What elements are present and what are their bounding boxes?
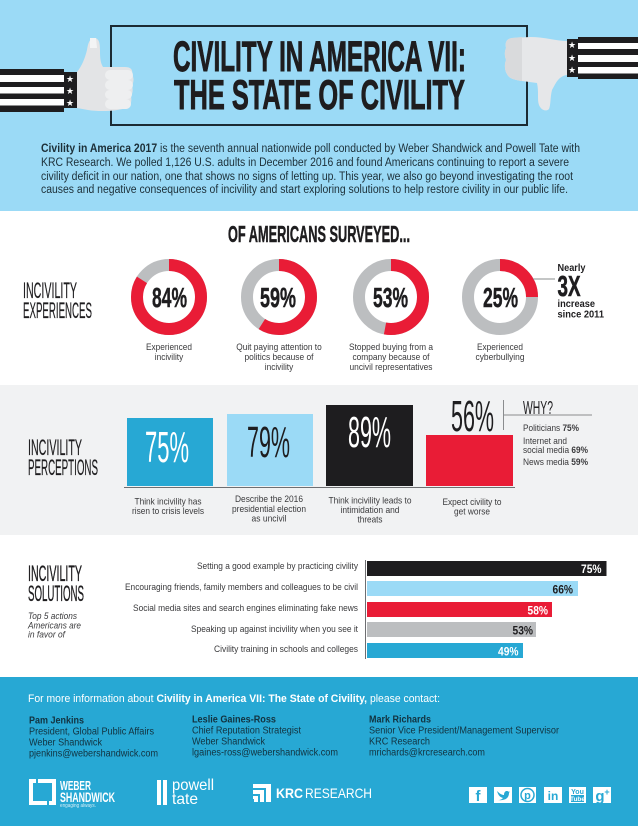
- why callout: [503, 398, 592, 467]
- logo: Powell Tate: [157, 777, 214, 808]
- bar: 75%: [127, 418, 213, 486]
- panel: incivility solutions: SOLUTIONS: [28, 581, 84, 606]
- contact: Mark Richards: [369, 714, 560, 758]
- donut: 25%: 25%: [483, 282, 518, 313]
- bar row: 58%: [133, 602, 552, 618]
- bar row: 75%: 75%: [581, 562, 602, 576]
- icon: thumbs up: ★: [66, 86, 74, 96]
- icon: thumbs up: ★: [66, 98, 74, 108]
- contact: Mark Richards: mrichards@krcresearch.com: [369, 748, 485, 758]
- icon: thumbs down: ★: [568, 65, 576, 75]
- section label: [28, 561, 84, 606]
- icon: facebook: f: [476, 788, 482, 805]
- icon: google plus: [593, 787, 611, 805]
- icon: linkedin: [544, 787, 562, 803]
- bar captions: as uncivil: [252, 514, 286, 524]
- section label: [23, 278, 92, 323]
- note: top 5 actions: [27, 611, 81, 640]
- donut captions: politics because of: [244, 352, 314, 362]
- contact: Leslie Gaines-Ross: Leslie Gaines-Ross: [192, 714, 276, 726]
- icon: google plus: +: [604, 787, 610, 797]
- icon: thumbs down: ★: [568, 53, 576, 63]
- intro text: Civility in America 2017 is the seventh annual nationwide poll conducted by Weber Shandwick and Powell Tate with: [41, 143, 580, 155]
- callout: nearly 3X: 3X: [558, 271, 581, 303]
- icon: linkedin: in: [548, 789, 558, 803]
- logo: KRC Research: RESEARCH: [305, 785, 372, 801]
- donut captions: incivility: [155, 352, 184, 362]
- bar captions: get worse: [454, 506, 490, 516]
- why callout: News media 59%: [523, 457, 588, 467]
- bar row: 49%: [214, 643, 523, 658]
- donut captions: incivility: [265, 362, 294, 372]
- section label: INCIVILITY: [23, 278, 77, 303]
- why callout: Internet and: [523, 436, 567, 446]
- icon: facebook: [469, 787, 487, 805]
- panel: footer: [0, 677, 638, 826]
- donut captions: Stopped buying from a: [349, 342, 434, 352]
- bar captions: [132, 494, 502, 524]
- contact: Leslie Gaines-Ross: Weber Shandwick: [192, 736, 266, 748]
- contact: Pam Jenkins: Weber Shandwick: [29, 738, 103, 748]
- donut captions: company because of: [352, 352, 430, 362]
- note: top 5 actions: Top 5 actions: [28, 611, 77, 621]
- bar row: 49%: 49%: [498, 644, 519, 658]
- icon: youtube: Tube: [570, 796, 585, 803]
- bar row: 53%: [191, 622, 536, 638]
- bar row: 66%: Encouraging friends, family members and colleagues to be civil: [125, 582, 358, 592]
- bar: 56%: [426, 392, 513, 486]
- donut: 59%: 59%: [260, 282, 296, 313]
- logo: Weber Shandwick: WEBER: [60, 778, 91, 793]
- donut captions: Quit paying attention to: [236, 342, 322, 352]
- bar captions: presidential election: [232, 504, 306, 514]
- section label: INCIVILITY: [28, 561, 82, 586]
- icon: thumbs up: [0, 38, 134, 112]
- bar captions: threats: [358, 514, 383, 524]
- donut: 59%: [247, 265, 311, 329]
- social icons: [469, 787, 611, 805]
- logo: Weber Shandwick: SHANDWICK: [60, 789, 115, 805]
- callout: nearly 3X: [533, 263, 604, 320]
- bar row: 53%: 53%: [512, 624, 533, 638]
- bar row: 58%: 58%: [528, 604, 548, 618]
- donut: 53%: 53%: [373, 282, 408, 313]
- icon: pinterest: p: [524, 790, 531, 802]
- intro text: civility deficit in our nation, one that shows no signs of letting up. This year, we also go beyond investigating the root: [41, 171, 574, 183]
- contact: Pam Jenkins: President, Global Public Affairs: [29, 726, 154, 738]
- donut captions: [146, 342, 524, 372]
- bar: 79%: [227, 414, 313, 486]
- intro text: [41, 143, 580, 196]
- bar captions: risen to crisis levels: [132, 506, 204, 516]
- bar row: 75%: Setting a good example by practicing civility: [197, 561, 358, 571]
- why callout: WHY?: [523, 398, 553, 418]
- icon: pinterest: [519, 787, 536, 803]
- bar captions: Describe the 2016: [235, 494, 303, 504]
- heading: of Americans surveyed: OF AMERICANS SURVEYED...: [228, 221, 410, 247]
- why callout: Politicians 75%: [523, 423, 579, 433]
- title frame: [111, 26, 527, 125]
- donut: 53%: [359, 265, 423, 329]
- icon: youtube: You: [571, 789, 584, 796]
- logo: KRC Research: KRC: [276, 785, 303, 801]
- bar captions: Expect civility to: [442, 497, 502, 507]
- donut captions: Experienced: [146, 342, 192, 352]
- bar: 89%: 89%: [348, 408, 391, 457]
- title: [173, 33, 466, 118]
- callout: nearly 3X: since 2011: [558, 310, 604, 320]
- bar: 75%: 75%: [145, 423, 189, 472]
- contact: Mark Richards: KRC Research: [369, 736, 430, 748]
- contact: Pam Jenkins: pjenkins@webershandwick.com: [29, 748, 158, 760]
- panel: incivility experiences: EXPERIENCES: [23, 298, 92, 323]
- panel: header: [0, 0, 638, 211]
- icon: thumbs down: ★: [568, 40, 576, 50]
- icon: thumbs down: [505, 37, 638, 110]
- contact: Leslie Gaines-Ross: lgaines-ross@webershandwick.com: [192, 748, 338, 758]
- section label: INCIVILITY: [28, 435, 82, 460]
- bar: 79%: 79%: [247, 418, 290, 467]
- contact: Pam Jenkins: Pam Jenkins: [29, 716, 84, 726]
- bar captions: Think incivility leads to: [328, 496, 412, 506]
- bar row: 58%: Social media sites and search engines eliminating fake news: [133, 603, 358, 613]
- panel: incivility experiences: [0, 211, 638, 385]
- why callout: social media 69%: [523, 445, 588, 455]
- bar row: 66%: 66%: [552, 582, 573, 596]
- logo: Weber Shandwick: [29, 778, 115, 809]
- intro text: KRC Research. We polled 1,126 U.S. adults in December 2016 and found Americans continuing to report a severe: [41, 157, 569, 169]
- bar row: 49%: Civility training in schools and colleges: [214, 644, 358, 654]
- callout: nearly 3X: increase: [558, 299, 595, 310]
- contact: Leslie Gaines-Ross: [192, 714, 338, 758]
- bar: 56%: 56%: [451, 392, 494, 441]
- panel: incivility perceptions: PERCEPTIONS: [28, 455, 98, 480]
- panel: incivility perceptions: [0, 385, 638, 535]
- bar captions: Think incivility has: [134, 496, 202, 506]
- donut captions: cyberbullying: [476, 352, 524, 362]
- donut: 84%: [137, 265, 201, 329]
- donut: 84%: 84%: [152, 282, 187, 313]
- donut captions: Experienced: [477, 342, 523, 352]
- logo: KRC Research: [253, 784, 372, 802]
- logo: Weber Shandwick: engaging always.: [60, 803, 96, 809]
- donut captions: uncivil representatives: [350, 362, 433, 372]
- contact: Leslie Gaines-Ross: Chief Reputation Strategist: [192, 726, 301, 736]
- bar: 89%: [326, 405, 413, 486]
- icon: youtube: [569, 787, 586, 803]
- bar row: 66%: [125, 581, 578, 596]
- callout: nearly 3X: Nearly: [558, 263, 586, 274]
- icon: twitter: [494, 787, 512, 803]
- bar row: 75%: [197, 561, 606, 576]
- icon: thumbs up: ★: [66, 74, 74, 84]
- intro text: causes and negative consequences of incivility and start exploring solutions to help restore civility in our public life.: [41, 184, 568, 196]
- donut: 25%: [468, 265, 532, 329]
- bar row: 53%: Speaking up against incivility when you see it: [191, 624, 358, 634]
- note: top 5 actions: in favor of: [28, 630, 66, 640]
- logo: Powell Tate: tate: [172, 791, 198, 808]
- bar captions: intimidation and: [340, 505, 400, 515]
- contact: Pam Jenkins: [29, 716, 158, 760]
- icon: google plus: g: [595, 788, 605, 805]
- contact: Mark Richards: Mark Richards: [369, 714, 431, 726]
- contact: Mark Richards: Senior Vice President/Management Supervisor: [369, 726, 560, 736]
- panel: incivility solutions: [0, 535, 638, 677]
- section label: [28, 435, 98, 480]
- logo: Powell Tate: powell: [172, 777, 214, 794]
- contact intro: For more information about Civility in America VII: The State of Civility, please contact:: [28, 693, 440, 705]
- note: top 5 actions: Americans are: [27, 620, 81, 630]
